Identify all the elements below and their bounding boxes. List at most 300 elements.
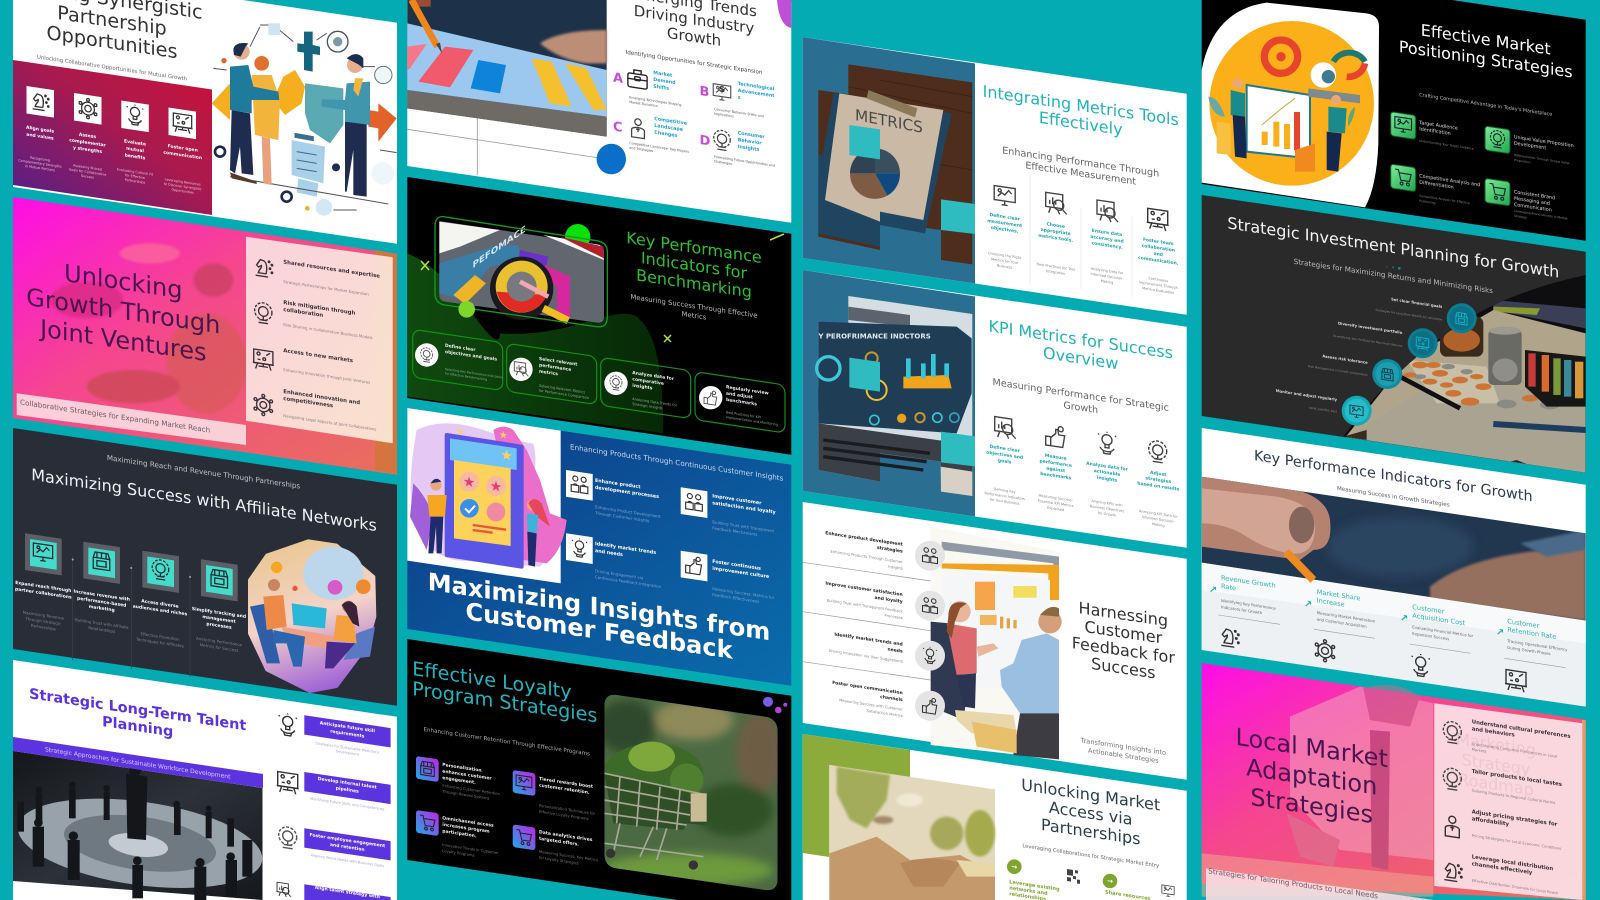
subtitle: Enhancing Products Through Continuous Customer Insights [570, 442, 784, 483]
column: define: Performance Indicators [985, 491, 1025, 501]
photo: desk edge [375, 250, 397, 474]
icon: collaboration [1147, 208, 1169, 231]
icon: KPIs [995, 417, 1016, 440]
subtitle strip [17, 393, 246, 445]
item: value proposition: Development [1514, 141, 1546, 151]
description: first column: Complementary Strengths [18, 158, 62, 169]
panel: Affiliate Networks slide [13, 428, 397, 706]
step: increase revenue: Increase revenue with [74, 589, 130, 603]
item: omnichannel [442, 815, 499, 861]
heading: Growth [667, 24, 721, 50]
item: omnichannel: Innovative Trends in Customer [442, 843, 499, 855]
card: analyze: Analyze data for [632, 370, 675, 382]
metric: acquisition cost [1412, 603, 1473, 645]
item: leverage networks: networks and [1009, 885, 1048, 897]
box: engagement [304, 828, 391, 860]
background: ghost roadmap poster: Strategy [1462, 750, 1531, 779]
metric: retention rate: Retention Rate [1507, 626, 1556, 641]
column: define: Metrics for Your [991, 257, 1019, 265]
item: market trends: Driving Innovation via User Suggestions [829, 649, 903, 664]
photo: laptop dashboard [817, 296, 975, 496]
icon: expand reach [25, 533, 62, 575]
technological advancements: Technological [738, 81, 775, 92]
icon: pricing [1445, 815, 1459, 838]
step: access audiences: Access diverse [141, 598, 179, 610]
item: consistent brand [1514, 189, 1569, 226]
competitive landscape: Competitive [654, 116, 688, 127]
icon: risk mitigation [255, 302, 272, 324]
metric: retention rate: Tracking Operational Efficiency [1506, 638, 1568, 652]
column: foster: communication. [1138, 255, 1179, 267]
heading: Key Performance [626, 228, 762, 267]
icon: circle 4 [915, 691, 945, 721]
item: goals: Set clear financial goals [1391, 296, 1443, 309]
column: ensure: Analyzing Data for [1091, 267, 1124, 275]
panel: Loyalty Program slide [407, 639, 791, 900]
item: data analytics: Data analytics drives [539, 829, 593, 843]
icon: data accuracy [1097, 200, 1118, 223]
item: competitive analysis: Positioning [1419, 199, 1436, 205]
item: improvement culture: Measuring Success: Metrics for [712, 586, 775, 600]
item: shared resources: Shared resources and expertise [283, 260, 380, 280]
subtitle: Enhancing Customer Retention Through Effective Programs [423, 727, 590, 758]
item: consistent brand: Leveraging Brand Identity in Market [1514, 209, 1569, 221]
item: improvement culture: Foster continuous [712, 559, 761, 572]
column: choose: Best Practices for Tool [1037, 262, 1075, 272]
item: improvement culture: Feedback Effectiveness [712, 592, 759, 604]
column: choose: Choose [1047, 221, 1065, 230]
illustration: hexagon with two colleagues [249, 541, 375, 692]
marker: monitor [1342, 396, 1372, 426]
item: consistent brand: Communication [1514, 202, 1552, 213]
heading: Indicators for [641, 248, 747, 283]
photo: leader on stage [12, 751, 268, 900]
note: anticipate: Development [336, 749, 360, 757]
illustration: phone with ratings: ★ [463, 474, 475, 492]
column: adjust: Informed Decision- [1142, 515, 1175, 524]
text: complementary: y strengths [73, 145, 102, 155]
step: simplify tracking: processes [206, 621, 232, 631]
item: value proposition [1514, 134, 1574, 170]
background: ghost roadmap poster [1456, 729, 1536, 800]
column: measure: Explained [1047, 506, 1064, 512]
icon: bulb [1412, 653, 1430, 677]
banner: Strategic Approaches for Sustainable Workforce Development [45, 746, 231, 781]
chart image: gauge dashboard: PEFOMACE [473, 224, 526, 271]
heading: Overview [1043, 343, 1118, 373]
item: satisfaction: and loyalty [874, 595, 903, 605]
column: analyze: Aligning KPIs with [1092, 499, 1122, 508]
icon: circle 2 [915, 591, 945, 621]
item: pricing: Adjust pricing strategies for [1472, 809, 1558, 828]
icon: briefcase [628, 69, 647, 89]
card: review: benchmarks [726, 397, 757, 408]
column: foster [1138, 236, 1179, 296]
text: foster: communication [163, 150, 202, 161]
item: market trends: Identify market trends [595, 541, 656, 556]
icon: data analytics [513, 824, 535, 850]
heading: Effectively [1039, 108, 1123, 139]
note: D: Forecasting Future Opportunities and [714, 155, 775, 168]
column: define: measurement [987, 218, 1023, 229]
heading: Unlocking Market [1021, 775, 1160, 815]
icon: shared resources [256, 259, 273, 278]
step: increase revenue: marketing [89, 604, 115, 614]
item: value proposition: Proposition [1514, 158, 1531, 164]
icon: knight [1221, 628, 1239, 648]
card: review: Regularly review [726, 384, 769, 397]
icon: target audience [1391, 112, 1416, 139]
description: first column: in Mutual Partners [25, 164, 55, 172]
item: customer satisfaction: Building Trust with Transparent [712, 519, 775, 534]
metric: retention rate [1506, 617, 1568, 659]
subtitle strip: Strategies for Tailoring Products to Local Needs [1208, 866, 1378, 900]
icon: board [1505, 669, 1527, 693]
technological advancements: Advancement [738, 88, 775, 99]
painting: two people at whiteboard [931, 527, 1062, 759]
subtitle: Measuring Success Through Effective [631, 293, 757, 320]
side panel [803, 37, 975, 284]
illustration: phone with ratings: ★ [456, 426, 464, 439]
note: second step: Relationships [88, 625, 115, 634]
heading: Adaptation [1246, 753, 1377, 801]
step: simplify tracking: management [202, 614, 236, 625]
photo edge [1582, 720, 1586, 900]
heading: Driving Industry [634, 2, 754, 37]
panel: benefits list [246, 237, 393, 443]
heading: Strategic Investment Planning for Growth [1227, 214, 1559, 282]
column: ensure: Ensure data [1092, 228, 1122, 238]
banner [13, 737, 263, 788]
decoration: purple dots [763, 697, 787, 713]
item: customer satisfaction: Improve customer [712, 493, 762, 507]
item: risk: Assess risk tolerance [1322, 353, 1368, 365]
subtitle: Enhancing Performance Through [1002, 145, 1159, 180]
card: select: Select relevant [539, 356, 578, 368]
column: adjust: based on results [1137, 481, 1180, 493]
item: market trends [566, 533, 662, 589]
photo: coins, jars and plans on desk [1340, 273, 1587, 473]
item: cultural: and behaviors [1472, 726, 1515, 739]
metric: market share: Increase [1317, 597, 1345, 609]
item: distribution: Leverage local distribution [1472, 854, 1553, 872]
item: enhance product: development processes [595, 485, 659, 500]
panel: Strategic Investment slide [1202, 195, 1587, 473]
text: align goals: and values [26, 132, 54, 142]
heading: Access via [1049, 798, 1132, 829]
heading: Strategies [1250, 783, 1373, 829]
panel: Customer Feedback Insights slide [407, 408, 791, 686]
item: communication: channels [880, 694, 903, 703]
text: align goals: Align goals [26, 125, 54, 135]
column: analyze: Business Objectives [1090, 504, 1125, 513]
heading: Strategic Long-Term Talent [29, 686, 246, 734]
heading: joint ventures title: Growth Through [26, 283, 220, 340]
item: diversify [1333, 321, 1403, 348]
item: value proposition: Unique Value Proposition [1514, 134, 1574, 149]
photo: hand holding pencil [1202, 473, 1600, 707]
item: data analytics: Measuring Success: Key Metrics [539, 850, 598, 862]
item: communication: Foster open communication [832, 680, 903, 696]
item: enhance product: Insights [888, 565, 903, 571]
item: communication: Satisfaction Metrics [866, 709, 903, 718]
item: enhance product: Enhancing Products Through Customer [831, 550, 903, 564]
metric: retention rate: Customer [1507, 617, 1540, 630]
column: choose: appropriate [1041, 227, 1071, 237]
note: A: Market Dynamics [629, 100, 658, 108]
note: fourth step: Analyzing Performance [196, 636, 243, 647]
gradient panel [13, 60, 212, 215]
item: tailor: Tailor products to local tastes [1472, 769, 1562, 788]
background: ghost roadmap poster: Marketing [1456, 729, 1536, 760]
description: fourth column: Leveraging Resources [165, 177, 201, 187]
heading: joint ventures title: Joint Ventures [38, 314, 207, 367]
item: monitor [1276, 388, 1338, 414]
metric: revenue growth: Identifying Key Performance [1221, 598, 1276, 611]
column: choose: metrics tools. [1038, 233, 1073, 244]
panel: Market Positioning slide [1202, 0, 1586, 241]
item note: innovation: Navigating Legal Aspects of Joint Collaborations [283, 413, 376, 432]
icon: value proposition [1485, 126, 1510, 154]
panel: strategies list [1434, 703, 1582, 900]
item: competitive analysis: Differentiation [1419, 180, 1454, 191]
column: foster: Metrics Evaluation [1142, 286, 1174, 295]
metric: market share [1317, 588, 1376, 630]
item: monitor: trend_satellite_best [1309, 406, 1338, 414]
item: competitive analysis: Competitive Analysis for Effective [1419, 194, 1470, 205]
card: review: Implementation and Monitoring [726, 415, 778, 427]
heading: Planning [102, 714, 173, 741]
note: B: Implications [714, 112, 734, 119]
box: pipelines: Develop internal talent [318, 776, 377, 791]
consumer behavior: Insights [738, 144, 759, 153]
photo: metrics clipboard: METRICS [855, 106, 923, 137]
heading: Customer Feedback [465, 597, 733, 665]
heading: Local Market [1236, 723, 1388, 773]
decoration: stars [421, 234, 784, 342]
icon: open communication [168, 108, 196, 139]
note: fourth step: Metrics for Success [200, 642, 238, 653]
panel: Local Market Adaptation slide [1202, 663, 1586, 900]
heading: Program Strategies [412, 677, 597, 727]
description: first column: Recognizing [30, 156, 50, 162]
column: define: Choosing the Right [988, 251, 1022, 260]
note: C: Competitive Landscape: Key Players [629, 141, 689, 154]
icon: diverse audiences [142, 551, 179, 593]
icon: personalization [416, 756, 439, 782]
heading: Key Performance Indicators for Growth [1254, 448, 1533, 505]
photo: hand with pen over chart [407, 0, 607, 137]
item: data analytics: targeted offers. [539, 836, 579, 848]
item: enhance product: Through Customer Insights [594, 510, 649, 523]
icon: objectives [994, 186, 1015, 207]
decoration: bright green circle [565, 224, 590, 249]
icon: align goals [26, 86, 54, 118]
column: ensure: Making [1101, 279, 1113, 285]
item: consistent brand: Messaging and [1514, 196, 1550, 207]
icon: measure [1046, 424, 1065, 448]
box: align strategy: Align talent strategy with [315, 885, 380, 900]
icon: talent pipeline [277, 771, 299, 795]
icon: adjust [1149, 440, 1167, 463]
arrow: acquisition: ↗ [1400, 613, 1408, 625]
item: enhance product: Enhance product development [825, 530, 904, 548]
item: personalization: Personalization [442, 762, 482, 774]
step: increase revenue: performance-based [77, 596, 126, 609]
item: tiered rewards: customer retention. [539, 783, 590, 796]
item: market trends: needs [888, 646, 903, 655]
item: omnichannel: Omnichannel access [442, 815, 494, 829]
icon: omnichannel cart [416, 810, 439, 836]
item: enhance product: Enhance product [595, 478, 641, 491]
marker: financial goals [1447, 303, 1477, 333]
item: market trends: and needs [595, 548, 623, 558]
item: tiered rewards: Tiered rewards boost [539, 776, 594, 790]
step: expand reach: partner collaborations [15, 586, 72, 601]
item: distribution [1472, 854, 1559, 896]
icon: QR grid [1067, 869, 1080, 884]
background: ghost roadmap poster: Roadmap [1458, 769, 1534, 800]
marker: risk [1372, 359, 1402, 389]
card: analyze: Analyzing Data Trends for [632, 397, 678, 408]
text: foster: Foster open [168, 143, 198, 154]
item: risk [1308, 353, 1368, 377]
metric: revenue growth: Revenue Growth [1221, 574, 1276, 590]
icon: trophy gear [714, 129, 730, 151]
item: satisfaction: Processes [884, 614, 903, 620]
icon: competitive cart [1391, 164, 1416, 192]
column: choose: Integration [1046, 269, 1065, 276]
label B: B [700, 84, 709, 100]
frame around image [435, 217, 607, 327]
item: satisfaction [825, 581, 904, 620]
item: enhance product: strategies [877, 545, 903, 555]
item: personalization: engagement. [442, 775, 476, 786]
note: B: Consumer Behavior Shifts and [714, 107, 764, 118]
item: risk: Risk Management in Growth Investments [1308, 364, 1368, 377]
illustration: partners shaking hands [212, 23, 397, 216]
item: tiered rewards: Personalization Techniques for [539, 804, 595, 816]
panel: Emerging Trends slide [407, 0, 791, 223]
heading: Effective Loyalty [412, 657, 572, 704]
item: pricing: affordability [1472, 816, 1509, 828]
panel: Market Access slide [803, 734, 1187, 900]
card: analyze: Strategic Insights [632, 402, 663, 411]
column: define: for Your Business [990, 498, 1020, 506]
subtitle: Growth [1063, 400, 1098, 416]
column: foster: and [1154, 251, 1163, 258]
subtitle: Transforming Insights into [1080, 736, 1166, 757]
icon: circle 1 [915, 541, 945, 571]
card: analyze: insights [632, 383, 653, 392]
column: ensure: Informed Decision- [1091, 272, 1124, 281]
photo: laptop dashboard: Y PEROFRIMANCE INDCTORS [817, 332, 931, 340]
item: tailor [1471, 769, 1562, 805]
icon: suited person [632, 118, 644, 139]
icon: arrow badge 1: → [1011, 862, 1017, 871]
note: first step: Partnerships [31, 623, 56, 632]
heading: Benchmarking [636, 266, 752, 302]
competitive landscape: Changes [654, 130, 678, 139]
side panel [803, 270, 975, 516]
column: analyze: actionable [1094, 468, 1120, 478]
description: second column: Goals for Collaborative [69, 167, 106, 177]
description: fourth column: to Discover Synergistic [164, 182, 202, 191]
item: risk mitigation: Risk mitigation through [283, 300, 355, 317]
item: enhance product: Enhancing Product Development [595, 504, 661, 519]
description: second column: Assessing Shared [73, 163, 102, 172]
item: personalization [441, 762, 500, 802]
illustration: phone with ratings: ★ [500, 447, 513, 465]
item: risk mitigation: collaboration [283, 307, 323, 319]
heading: KPI Metrics for Success [988, 316, 1173, 363]
column: ensure [1090, 228, 1124, 287]
decoration: lime circle [458, 301, 475, 318]
panel: KPI Benchmarking slide [407, 177, 791, 455]
market demand: Market [653, 70, 673, 79]
item: tiered rewards [539, 776, 595, 822]
metric: revenue growth: Indicators for Growth [1221, 604, 1263, 615]
item: personalization: Enhancing Customer Retention [442, 784, 500, 796]
subtitle: Crafting Competitive Advantage in Today's Marketplace [1419, 92, 1552, 118]
box: pipelines: pipelines [336, 785, 359, 795]
card: define: Selecting Key Performance Indicators [445, 367, 503, 380]
item: omnichannel: increases program [442, 822, 490, 835]
metric: acquisition cost: Acquisition Cost [1412, 612, 1466, 627]
item: cultural: Understand cultural preferences [1472, 719, 1571, 740]
heading: partnership title: Opportunities [47, 21, 177, 63]
column: analyze: for Growth [1098, 511, 1116, 518]
item note: shared resources: Strategic Partnerships for Market Expansion [283, 279, 369, 297]
note: C: and Strategies [629, 146, 654, 153]
item: data analytics [539, 829, 598, 868]
icon: engagement [279, 826, 297, 849]
subtitle: Identifying Opportunities for Strategic Expansion [626, 50, 763, 76]
icon: new markets [253, 349, 274, 371]
item: target audience: Identification [1419, 126, 1451, 137]
item: target audience: Understanding Your Target Audience [1419, 139, 1474, 151]
heading: Success [1091, 654, 1155, 682]
subtitle strip: Collaborative Strategies for Expanding Market Reach [20, 398, 210, 435]
heading: Feedback for [1072, 633, 1175, 667]
note: pipelines: Identifying Future Skills and Competencies [310, 797, 385, 812]
column: adjust: Analyzing KPI Data for [1139, 509, 1178, 519]
heading: Effective Market [1421, 20, 1551, 59]
icon: metrics tools [1046, 192, 1067, 215]
heading: partnership title: Partnership [57, 1, 167, 40]
decoration: magenta corner [777, 0, 791, 28]
heading: Positioning Strategies [1399, 37, 1573, 82]
item: market trends: Driving Engagement via [595, 568, 644, 581]
item: pricing: Pricing Strategies for Local Economic Conditions [1472, 834, 1561, 851]
icon: arrow badge 2 [1103, 874, 1117, 888]
box: anticipate: requirements [330, 729, 365, 740]
item: data analytics: for Loyalty Strategies [539, 856, 579, 866]
box: anticipate [304, 715, 391, 747]
item: access: Access to new markets [283, 348, 353, 364]
panel: Harnessing Customer Feedback slide [803, 502, 1187, 780]
decoration: dark green wave [407, 253, 663, 433]
text: evaluate: Evaluate [124, 138, 146, 148]
box: pipelines [304, 772, 391, 804]
heading: joint ventures title: Unlocking [64, 259, 182, 304]
illustration: phone with ratings [407, 408, 567, 583]
column: measure [1038, 452, 1074, 514]
item: market trends: Continuous Feedback Integration [595, 574, 662, 589]
item: competitive analysis [1419, 173, 1480, 210]
text: evaluate: mutual [126, 146, 144, 154]
column: foster: Improvement Through [1139, 280, 1178, 290]
